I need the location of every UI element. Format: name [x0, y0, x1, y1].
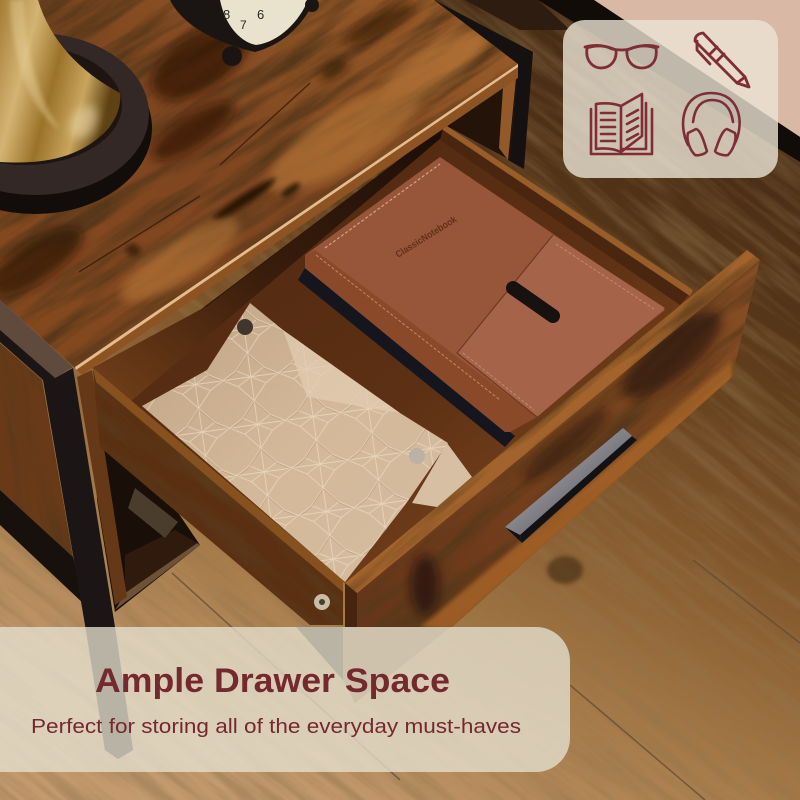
drawer: interior floor — [105, 128, 692, 583]
heading: Ample Drawer Space — [95, 662, 450, 700]
icon: headphones — [683, 93, 740, 155]
clock numerals: 8 — [223, 7, 230, 22]
alarm clock: 7 — [240, 18, 247, 32]
pouch: silver snap — [409, 448, 425, 464]
subheading: Perfect for storing all of the everyday must-haves — [31, 716, 521, 738]
pouch: quilted beige fabric — [142, 303, 472, 582]
tabletop: front edge band — [75, 64, 518, 375]
notebook: black underside — [298, 268, 515, 447]
nightstand: back opening — [110, 70, 518, 395]
alarm clock — [170, 0, 319, 66]
nightstand: wood front strip — [77, 370, 127, 605]
nightstand: lower black rail — [0, 490, 85, 605]
screw: drawer slide — [314, 594, 330, 610]
lamp: round black base — [0, 0, 152, 214]
nightstand: far side black frame — [434, 0, 533, 169]
drawer: black handle — [505, 428, 637, 543]
floor reflection: leg and drawer seen through caption — [87, 627, 451, 759]
nightstand: dark shelf opening — [95, 390, 200, 612]
nightstand: right wood post — [499, 78, 516, 160]
icon: open book — [591, 94, 652, 154]
nightstand: left black leg — [0, 320, 133, 759]
alarm clock: 6 — [257, 7, 264, 22]
icon: glasses — [585, 45, 658, 68]
top panel: rustic wood tabletop — [0, 0, 518, 375]
lamp: gold cone — [0, 0, 120, 163]
notebook: embossed logo: ClassicNotebook — [394, 214, 460, 261]
icons panel — [563, 20, 778, 178]
drawer: right wall rim — [440, 124, 693, 305]
notebook: brown leather cover — [305, 157, 665, 432]
notebook: pocket slot — [513, 288, 553, 316]
drawer: front face — [345, 250, 760, 630]
caption panel — [0, 627, 570, 772]
icon: pen — [695, 33, 749, 87]
pouch: dark snap — [237, 319, 253, 335]
drawer: back wall — [92, 117, 455, 402]
drawer: left outer side — [93, 368, 343, 625]
nightstand: metal corner band — [0, 300, 73, 378]
nightstand: left wood side panel — [0, 343, 73, 557]
